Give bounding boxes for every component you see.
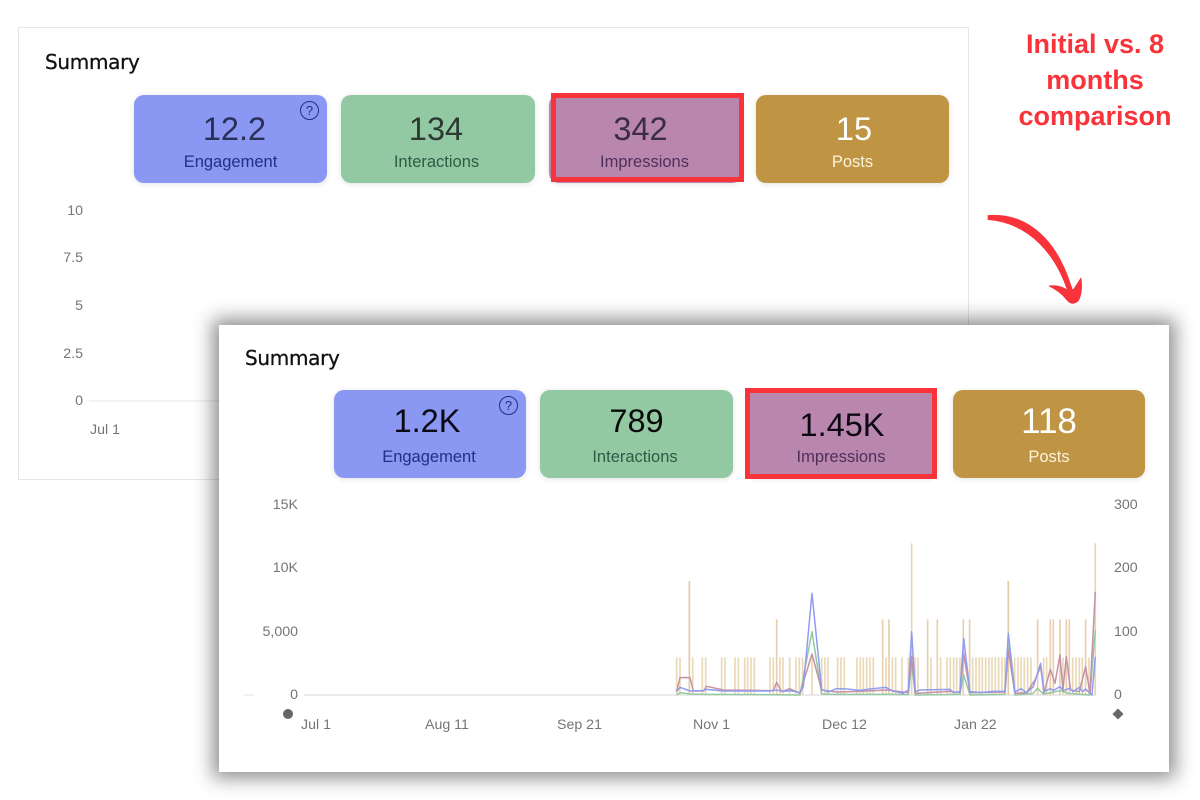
icon: help bbox=[499, 396, 518, 415]
axis: initial y labels: 0 bbox=[75, 393, 83, 409]
value: interactions 789: 789 bbox=[609, 403, 664, 439]
title: comparison note: months bbox=[1046, 65, 1144, 95]
arrow: initial to current bbox=[988, 214, 1082, 304]
red line bbox=[677, 592, 1095, 693]
icon: help: ? bbox=[306, 103, 313, 118]
axis: x labels bbox=[301, 717, 997, 733]
value: impressions 342: 342 bbox=[613, 111, 668, 147]
label: engagement: Engagement bbox=[184, 153, 277, 171]
slider handle: end bbox=[1112, 708, 1124, 720]
card: current interactions bbox=[540, 390, 733, 478]
posts bars bbox=[677, 657, 1089, 695]
heading: current summary: Summary bbox=[245, 346, 340, 370]
axis: x labels: Sep 21 bbox=[557, 717, 602, 733]
highlight: initial impressions bbox=[551, 93, 744, 182]
axis: initial y labels: 2.5 bbox=[63, 346, 83, 362]
chart: posts and engagement over time bbox=[244, 543, 1124, 720]
axis: initial x label: Jul 1 bbox=[90, 422, 120, 438]
card: initial posts bbox=[756, 95, 949, 183]
highlight: current impressions bbox=[745, 388, 937, 479]
title: comparison note: comparison bbox=[1018, 101, 1172, 131]
card: current posts bbox=[953, 390, 1145, 478]
card: initial interactions bbox=[341, 95, 535, 183]
icon: help: ? bbox=[505, 398, 512, 413]
value: interactions 134: 134 bbox=[409, 111, 463, 147]
label: interactions: Interactions bbox=[592, 448, 678, 466]
axis: initial y labels: 7.5 bbox=[63, 250, 83, 266]
axis: initial y labels: 10 bbox=[67, 203, 83, 219]
panel: current summary bbox=[219, 325, 1169, 772]
axis: right y labels bbox=[1114, 497, 1138, 703]
axis: x labels: Dec 12 bbox=[822, 717, 867, 733]
blue line bbox=[677, 593, 1095, 695]
title: comparison note bbox=[1018, 29, 1172, 131]
axis: left y labels: 10K bbox=[273, 560, 298, 576]
axis: right y labels: 200 bbox=[1114, 560, 1138, 576]
title: comparison note: Initial vs. 8 bbox=[1026, 29, 1164, 59]
axis: x labels: Jul 1 bbox=[301, 717, 331, 733]
axis: left y labels bbox=[262, 497, 298, 703]
value: posts 118: 118 bbox=[1021, 402, 1077, 441]
card: current impressions bbox=[747, 390, 937, 478]
label: interactions: Interactions bbox=[394, 153, 479, 171]
card: current engagement bbox=[334, 390, 526, 478]
axis: left y labels: 15K bbox=[273, 497, 298, 513]
axis: left y labels: 0 bbox=[290, 687, 298, 703]
axis: initial baseline bbox=[89, 400, 229, 402]
value: posts 15: 15 bbox=[836, 111, 872, 147]
heading: initial summary: Summary bbox=[45, 50, 140, 74]
axis: right y labels: 100 bbox=[1114, 624, 1138, 640]
card: initial impressions bbox=[549, 95, 742, 183]
label: engagement: Engagement bbox=[382, 448, 476, 466]
label: impressions: Impressions bbox=[600, 153, 689, 171]
label: impressions: Impressions bbox=[797, 448, 885, 466]
slider handle: start bbox=[283, 709, 293, 719]
axis: right y labels: 300 bbox=[1114, 497, 1138, 513]
axis: x labels: Nov 1 bbox=[693, 717, 730, 733]
axis: initial y labels: 5 bbox=[75, 298, 83, 314]
icon: help bbox=[300, 101, 319, 120]
axis: x labels: Aug 11 bbox=[425, 717, 469, 733]
axis: right y labels: 0 bbox=[1114, 687, 1122, 703]
green line bbox=[677, 630, 1095, 695]
label: posts: Posts bbox=[1028, 448, 1070, 466]
axis: left y labels: 5,000 bbox=[262, 624, 298, 640]
panel: initial summary bbox=[18, 27, 969, 480]
value: engagement 1.2K: 1.2K bbox=[394, 403, 460, 439]
value: impressions 1.45K: 1.45K bbox=[800, 407, 884, 443]
axis: initial y labels bbox=[63, 203, 83, 409]
card: initial engagement bbox=[134, 95, 327, 183]
value: engagement 12.2: 12.2 bbox=[203, 111, 266, 147]
axis: x labels: Jan 22 bbox=[954, 717, 997, 733]
label: posts: Posts bbox=[832, 153, 873, 171]
